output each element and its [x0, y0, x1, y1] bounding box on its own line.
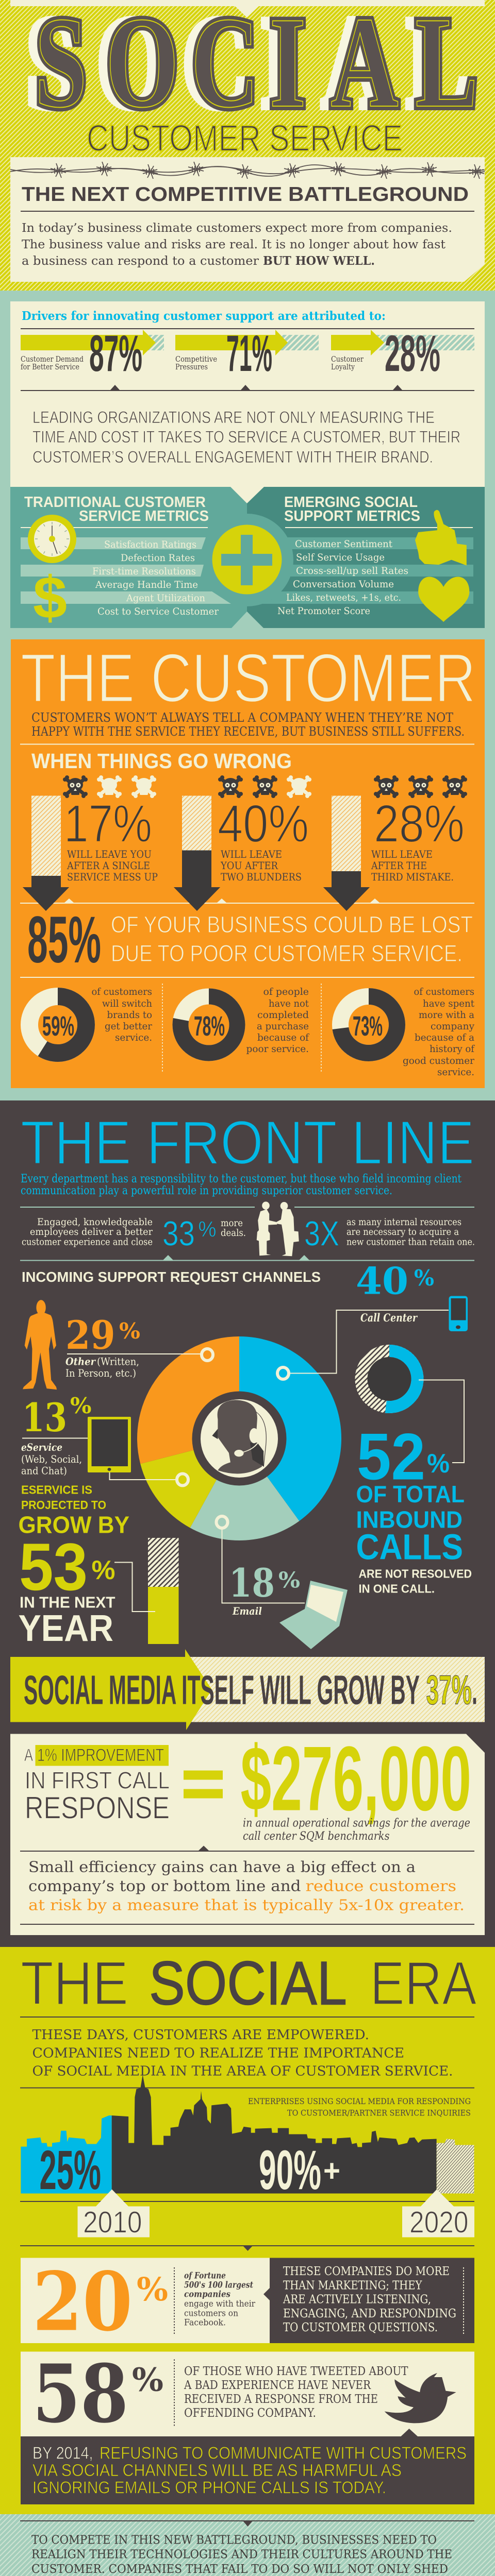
driver 71%: Pressures [175, 362, 208, 371]
improvement statement: IN FIRST CALL [25, 1767, 170, 1794]
panel: first call response [10, 1727, 485, 1935]
donut 73%: service. [437, 1066, 474, 1078]
icon: laptop [279, 1581, 348, 1649]
stat 33%: deals. [221, 1227, 246, 1239]
donut 59%: of customers [92, 986, 152, 997]
panel: 58% twitter: % [132, 2361, 163, 2399]
callout: eservice growth 53%: IN THE NEXT [20, 1593, 116, 1612]
stat 17% [23, 794, 158, 911]
stat 40%: WILL LEAVE [221, 848, 282, 860]
callout: call center 40%: Call Center [360, 1311, 418, 1324]
callout: 52% unresolved: OF TOTAL [356, 1481, 465, 1507]
panel: 58% twitter: RECEIVED A RESPONSE FROM THE [184, 2393, 378, 2406]
donut 73%: of customers [414, 986, 474, 997]
icon: thumbs up [415, 510, 467, 566]
banner: social media growth [10, 1649, 485, 1730]
icon: phone [449, 1296, 468, 1331]
section: conclusion [0, 2514, 495, 2576]
traditional metrics list: SERVICE METRICS [79, 508, 209, 524]
driver 71%: 71% [226, 325, 272, 382]
traditional metrics list: Satisfaction Ratings [104, 539, 196, 550]
stat 33%: employees deliver a better [30, 1226, 153, 1238]
stat 33% [22, 1214, 246, 1253]
donut 78%: have not [269, 998, 309, 1009]
callout: eservice 13%: and Chat) [21, 1464, 67, 1477]
heading: ERA [370, 1948, 476, 2018]
stat 33%: % [198, 1217, 217, 1242]
teal background [0, 291, 495, 1100]
lead text: CUSTOMERS WON’T ALWAYS TELL A COMPANY WHEN THEY’RE NOT [31, 710, 453, 725]
callout: eservice 13%: eService [21, 1441, 62, 1453]
heading: SOCIAL [149, 1948, 347, 2018]
intro text: a business can respond to a customer [22, 255, 259, 268]
skull icons [63, 775, 467, 798]
traditional metrics list: Average Handle Time [95, 579, 198, 590]
stat 40%: 40% [218, 794, 309, 853]
panel: 20% fortune 500: TO CUSTOMER QUESTIONS. [283, 2321, 438, 2334]
stat 3X [304, 1214, 475, 1253]
panel: 20% fortune 500: ARE ACTIVELY LISTENING, [283, 2293, 431, 2306]
intro text [22, 222, 452, 268]
donut 73%: company [431, 1021, 474, 1032]
callout: eservice 13%: 13 [22, 1395, 67, 1440]
donut 73%: because of a [415, 1032, 474, 1043]
panel: 20% fortune 500: 20 [32, 2255, 133, 2349]
panel: metrics [10, 487, 485, 631]
donut 78%: poor service. [246, 1043, 309, 1055]
remaining hatch skyline [437, 2139, 474, 2194]
callout: email 18% [217, 1516, 348, 1649]
stat 40% [174, 794, 309, 911]
icon: clock [28, 515, 76, 563]
barbed wire [10, 162, 485, 179]
callout: eservice 13%: (Web, Social, [21, 1453, 82, 1465]
improvement statement: 1% IMPROVEMENT [37, 1745, 164, 1765]
donut 73%: good customer [403, 1055, 475, 1066]
panel: 20% fortune 500: of Fortune [184, 2271, 226, 2280]
icon: person [23, 1300, 57, 1389]
top cream tab [10, 0, 485, 18]
donut 59% [29, 986, 153, 1053]
donut 78%: a purchase [257, 1021, 309, 1032]
equals sign [184, 1770, 223, 1798]
stat 33%: Engaged, knowledgeable [37, 1216, 153, 1228]
panel: by 2014: VIA SOCIAL CHANNELS WILL BE AS HARMFUL AS [32, 2461, 402, 2480]
panel: intro [10, 157, 485, 282]
donut 78%: completed [257, 1009, 309, 1021]
icon: tablet [88, 1417, 131, 1472]
driver 71% [175, 325, 319, 382]
donut 73%: more with a [419, 1009, 474, 1021]
donut 59%: 59% [42, 1011, 74, 1042]
savings caption: call center SQM benchmarks [243, 1830, 390, 1843]
donut 73%: history of [430, 1043, 475, 1055]
stat 17%: WILL LEAVE YOU [67, 848, 152, 860]
85% callout [27, 903, 473, 977]
callout: email 18%: Email [232, 1605, 262, 1617]
callout: 52% unresolved: IN ONE CALL. [359, 1582, 435, 1595]
icon: bird [385, 2373, 456, 2423]
efficiency text [28, 1858, 465, 1913]
icon: dollar: $ [33, 564, 67, 631]
stat 28%: THIRD MISTAKE. [371, 871, 454, 883]
driver 87%: Customer Demand [21, 354, 84, 364]
stat 40%: TWO BLUNDERS [221, 871, 302, 883]
traditional metrics list: Defection Rates [121, 552, 195, 564]
efficiency text: Small efficiency gains can have a big effect on a [28, 1858, 416, 1875]
traditional metrics list: Agent Utilization [126, 592, 205, 604]
callout: other 29%: Other [65, 1355, 96, 1367]
callout: 52% unresolved: CALLS [356, 1527, 463, 1567]
emerging metrics list: Conversation Volume [293, 579, 394, 590]
callout: other 29%: % [119, 1318, 140, 1344]
icon: plus [212, 514, 293, 606]
skyline chart [21, 2075, 474, 2201]
pie chart: support channels [137, 1336, 341, 1540]
callout: eservice growth 53%: ESERVICE IS [21, 1483, 92, 1496]
donut 78%: of people [263, 986, 309, 997]
callout: eservice growth 53%: % [92, 1555, 116, 1585]
section: the front line [0, 1100, 495, 1947]
emerging metrics list: Likes, retweets, +1s, etc. [286, 592, 401, 603]
driver 71%: Competitive [175, 354, 217, 364]
intro text: BUT HOW WELL. [263, 254, 375, 268]
banner: social media growth: . [472, 1667, 477, 1713]
callout: call center 40%: % [414, 1265, 434, 1291]
efficiency text: company’s top or bottom line and [28, 1877, 301, 1895]
panel: 58% twitter: A BAD EXPERIENCE HAVE NEVER [184, 2379, 371, 2392]
panel: 58% twitter: OFFENDING COMPANY. [184, 2406, 316, 2420]
donut 73% [340, 986, 475, 1078]
panel: 20% fortune 500: 500's 100 largest [184, 2280, 253, 2290]
donut 78% [180, 986, 310, 1055]
driver 28%: Loyalty [331, 362, 355, 371]
donut 59%: will switch [102, 998, 152, 1009]
panel: 20% fortune 500: companies [184, 2290, 230, 2299]
label: 2010 [77, 2190, 150, 2239]
emerging metrics list: Customer Sentiment [295, 538, 392, 550]
callout: eservice growth 53% [19, 1483, 178, 1649]
stat 28% [323, 794, 465, 911]
stat 28%: AFTER THE [371, 859, 427, 872]
lead text: OF SOCIAL MEDIA IN THE AREA OF CUSTOMER SERVICE. [32, 2064, 453, 2079]
donut 59%: get better [105, 1021, 153, 1032]
panel: 20% fortune 500: customers on [184, 2308, 238, 2318]
conclusion text: CUSTOMER. COMPANIES THAT FAIL TO DO SO WILL NOT ONLY SHED [31, 2563, 448, 2576]
stat 28%: 28% [374, 794, 465, 853]
stat 33%: 33 [162, 1214, 195, 1253]
emerging metrics list: Net Promoter Score [277, 605, 370, 617]
panel: by 2014: BY 2014, [32, 2443, 93, 2463]
efficiency text: at risk by a measure that is typically 5x-10x greater. [28, 1896, 465, 1913]
callout: eservice growth 53%: 53 [19, 1529, 88, 1604]
panel: 20% fortune 500: THESE COMPANIES DO MORE [283, 2265, 450, 2278]
donut 78%: 78% [194, 1011, 225, 1042]
panel: 58% twitter [21, 2346, 474, 2441]
donut 59%: service. [115, 1032, 152, 1043]
panel: 20% fortune 500: % [137, 2270, 168, 2308]
improvement statement: RESPONSE [25, 1791, 170, 1825]
panel: the customer [11, 639, 485, 1088]
panel: 58% twitter: 58 [32, 2346, 128, 2441]
stat 33%: more [221, 1217, 243, 1229]
improvement statement [24, 1745, 170, 1825]
panel: 58% twitter: OF THOSE WHO HAVE TWEETED ABOUT [184, 2365, 408, 2378]
callout: call center 40%: 40 [356, 1259, 408, 1302]
callout: 52% unresolved: ARE NOT RESOLVED [359, 1567, 472, 1581]
lead text [31, 710, 465, 739]
driver 87%: for Better Service [21, 362, 79, 371]
stat 33%: customer experience and close [22, 1236, 153, 1248]
label: 2020 [402, 2190, 474, 2239]
icon: agent with headset [192, 1391, 287, 1486]
donut 59%: brands to [107, 1009, 152, 1021]
panel: 20% fortune 500: engage with their [184, 2299, 255, 2309]
callout: eservice 13%: % [70, 1393, 92, 1418]
traditional metrics list: First-time Resolutions [92, 566, 196, 577]
chart caption: ENTERPRISES USING SOCIAL MEDIA FOR RESPONDING [248, 2096, 471, 2106]
callout: call center 40% [277, 1259, 468, 1379]
panel: 20% fortune 500: ENGAGING, AND RESPONDING [283, 2307, 456, 2320]
improvement statement: A [24, 1745, 33, 1765]
emerging metrics list: SUPPORT METRICS [284, 508, 420, 524]
stat 40%: YOU AFTER [220, 859, 278, 872]
intro text: The business value and risks are real. It is no longer about how fast [22, 238, 446, 251]
subtitle: CUSTOMER SERVICE [87, 118, 403, 159]
callout: email 18%: % [278, 1567, 300, 1593]
panel: drivers [10, 301, 485, 487]
heading: THE [21, 1948, 128, 2018]
leading organizations text [32, 408, 460, 466]
conclusion text: TO COMPETE IN THIS NEW BATTLEGROUND, BUSINESSES NEED TO [31, 2534, 437, 2547]
lead text: THESE DAYS, CUSTOMERS ARE EMPOWERED. [32, 2027, 369, 2043]
chart caption [248, 2096, 471, 2117]
heading: THE NEXT COMPETITIVE BATTLEGROUND [22, 183, 469, 206]
header section: title and intro [0, 0, 495, 291]
stat 3X: as many internal resources [346, 1216, 461, 1228]
traditional metrics list: Cost to Service Customer [97, 606, 219, 617]
emerging metrics list: EMERGING SOCIAL [284, 494, 418, 511]
callout: 52% unresolved: 52 [357, 1420, 425, 1494]
panel: 20% fortune 500: THAN MARKETING; THEY [283, 2279, 422, 2293]
callout: eservice growth 53%: YEAR [19, 1608, 113, 1649]
skyline chart: 90% [259, 2139, 321, 2201]
icon: heart [418, 577, 469, 622]
callout: 52% unresolved: % [427, 1449, 450, 1479]
donut: 52% [361, 1351, 418, 1407]
donut 78%: because of [257, 1032, 310, 1043]
callout: 52% unresolved [356, 1351, 472, 1595]
label: 2010: 2010 [83, 2205, 142, 2239]
callout: other 29%: 29 [65, 1312, 116, 1358]
driver 28% [331, 325, 474, 382]
callout: other 29% [23, 1300, 213, 1389]
emerging metrics list: Self Service Usage [296, 552, 385, 563]
chart caption: TO CUSTOMER/PARTNER SERVICE INQUIRIES [287, 2108, 471, 2117]
donut 73%: 73% [353, 1011, 383, 1042]
stat 3X: new customer than retain one. [346, 1236, 475, 1248]
heading [21, 1948, 476, 2018]
panel: 20% fortune 500 [21, 2255, 474, 2349]
callout: eservice 13% [21, 1393, 188, 1486]
driver 28%: Customer [331, 354, 364, 364]
conclusion text [31, 2534, 464, 2576]
emerging metrics list: Cross-sell/up sell Rates [296, 565, 408, 577]
stat 3X: 3X [304, 1214, 339, 1253]
callout: email 18%: 18 [229, 1560, 275, 1606]
stat 17%: SERVICE MESS UP [67, 871, 158, 883]
subheading: WHEN THINGS GO WRONG [31, 749, 292, 773]
icon: handshake [257, 1201, 299, 1256]
callout: 52% unresolved: INBOUND [356, 1506, 463, 1533]
lead text: communication play a powerful role in providing superior customer service. [21, 1184, 392, 1197]
stat 17%: 17% [64, 794, 152, 853]
stat 17%: AFTER A SINGLE [67, 859, 150, 872]
bar: growth [148, 1538, 178, 1644]
driver 87% [21, 325, 164, 382]
stat 28%: WILL LEAVE [371, 848, 433, 860]
lead text: COMPANIES NEED TO REALIZE THE IMPORTANCE [32, 2045, 404, 2061]
85% callout: 85% [27, 903, 101, 977]
lead text [21, 1173, 461, 1197]
conclusion text: REALIGN THEIR TECHNOLOGIES AND THEIR CULTURES AROUND THE [31, 2548, 452, 2562]
donut 73%: have spent [423, 998, 474, 1009]
callout: other 29%: In Person, etc.) [65, 1367, 136, 1379]
traditional metrics list: TRADITIONAL CUSTOMER [24, 494, 206, 511]
callout: eservice growth 53%: PROJECTED TO [21, 1498, 106, 1512]
channels heading: INCOMING SUPPORT REQUEST CHANNELS [22, 1269, 321, 1285]
savings caption [243, 1817, 470, 1843]
efficiency text: reduce customers [305, 1877, 456, 1895]
panel: by 2014: IGNORING EMAILS OR PHONE CALLS IS TODAY. [32, 2478, 386, 2497]
2020 dark skyline [112, 2075, 437, 2194]
driver 28%: 28% [385, 325, 440, 382]
skyline chart: 25% [39, 2139, 101, 2201]
lead text [32, 2027, 453, 2079]
drivers heading: Drivers for innovating customer support are attributed to: [22, 309, 386, 323]
emerging metrics list [242, 494, 473, 617]
skyline chart: + [323, 2154, 340, 2188]
callout: eservice growth 53%: GROW BY [19, 1512, 129, 1538]
panel: 20% fortune 500: Facebook. [184, 2317, 226, 2328]
callout: other 29%: (Written, [97, 1355, 139, 1367]
intro text: In today’s business climate customers expect more from companies. [22, 222, 452, 235]
stat 3X: are necessary to acquire a [346, 1226, 459, 1238]
traditional metrics list [21, 494, 231, 617]
label: 2020: 2020 [409, 2205, 468, 2239]
driver 87%: 87% [89, 325, 142, 382]
2010 blue skyline [21, 2115, 112, 2194]
section: the social era [0, 1947, 495, 2514]
panel: by 2014 [21, 2429, 474, 2504]
